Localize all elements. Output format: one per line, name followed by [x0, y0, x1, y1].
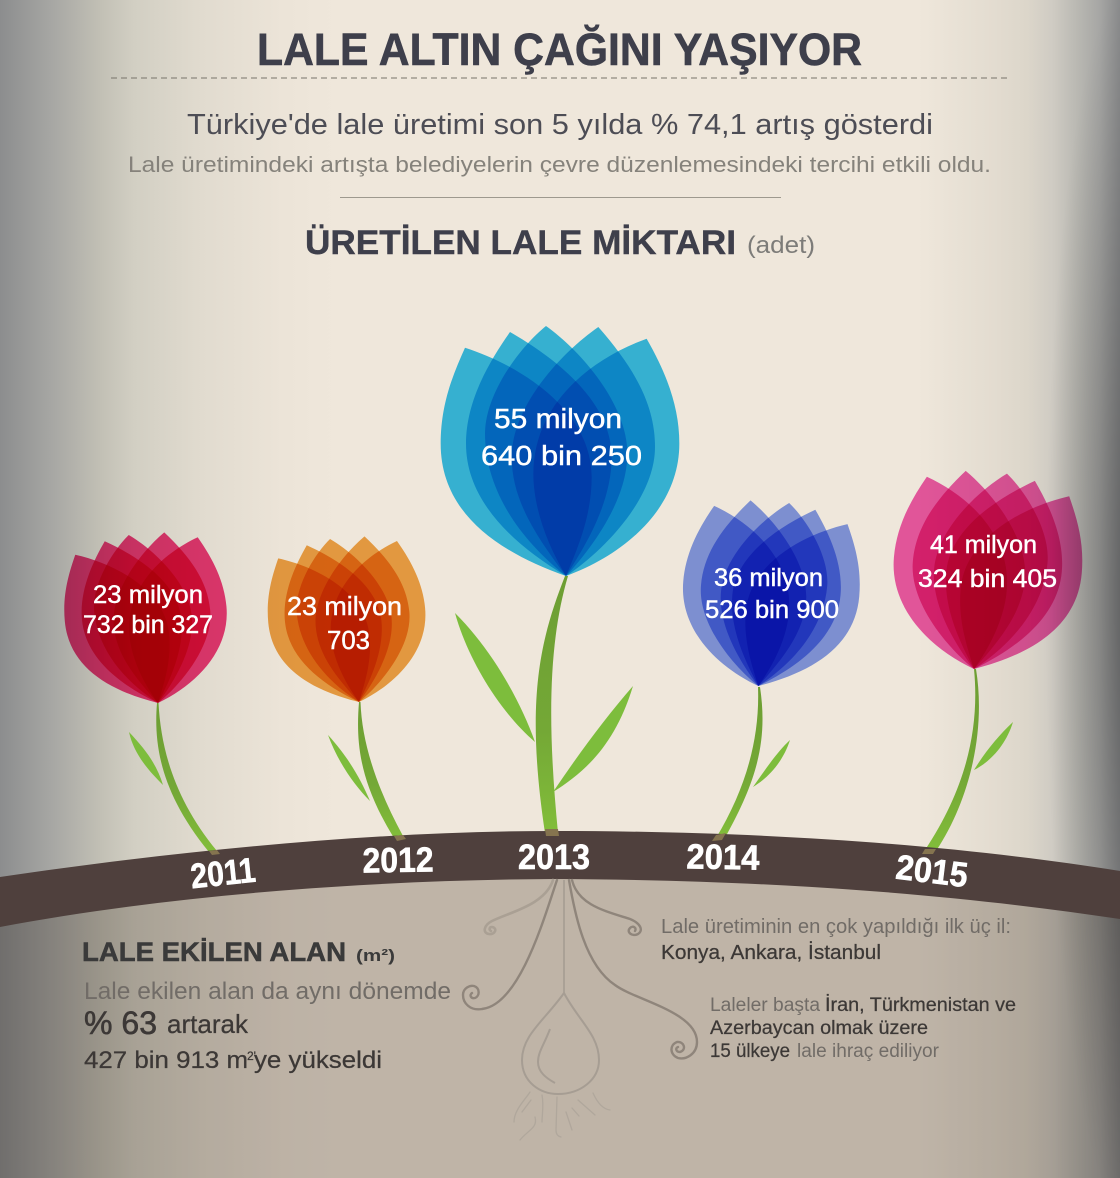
planted area value: ye yükseldi [254, 1047, 382, 1074]
stem and leaf 2011 [129, 703, 217, 852]
value 2011: 23 milyon [93, 581, 203, 609]
panel: exports [710, 995, 1016, 1062]
panel: top provinces: Lale üretiminin en çok yapıldığı ilk üç il: [661, 916, 1011, 938]
panel: top provinces: Konya, Ankara, İstanbul [661, 941, 881, 964]
value 2014: 36 milyon [714, 564, 823, 592]
panel: exports: Azerbaycan olmak üzere [710, 1018, 928, 1039]
value 2013 [481, 403, 642, 471]
value 2015: 324 bin 405 [918, 565, 1057, 593]
roots and bulb [463, 880, 697, 1140]
panel: exports: Laleler başta [710, 995, 820, 1016]
value 2012: 703 [327, 625, 370, 655]
value 2015 [918, 531, 1057, 593]
planted area heading: LALE EKİLEN ALAN [82, 937, 346, 967]
value 2013: 640 bin 250 [481, 440, 642, 471]
year 2011: 2011 [189, 851, 257, 896]
planted area value [84, 1047, 382, 1074]
value 2013: 55 milyon [494, 403, 622, 434]
year labels [189, 837, 970, 896]
value 2011 [83, 581, 213, 639]
value 2012 [287, 591, 402, 655]
faint root spiral [485, 880, 553, 934]
stem and leaf 2015 [925, 669, 1013, 851]
tulip 2015 [885, 464, 1090, 678]
chart heading: ÜRETİLEN LALE MİKTARI [305, 224, 736, 262]
stem roots in band [209, 829, 936, 855]
title: LALE ALTIN ÇAĞINI YAŞIYOR [257, 24, 862, 75]
tulip 2012 [261, 531, 433, 710]
root spiral to left text [463, 880, 557, 1009]
planted area value: 2' [247, 1049, 256, 1063]
stem and leaves 2013 [455, 576, 633, 833]
rootlets [514, 1092, 610, 1140]
soil below ground [0, 855, 1120, 1178]
panel: exports: lale ihraç ediliyor [797, 1041, 940, 1062]
value 2014: 526 bin 900 [705, 596, 839, 624]
planted area heading: (m²) [356, 946, 395, 965]
year 2012: 2012 [362, 840, 434, 881]
panel: exports: 15 ülkeye [710, 1041, 790, 1062]
planted area increase [84, 1005, 249, 1041]
description: Lale üretimindeki artışta belediyelerin çevre düzenlemesindeki tercihi etkili oldu. [128, 152, 991, 177]
year 2015: 2015 [894, 848, 970, 895]
planted area increase: artarak [167, 1009, 249, 1039]
planted area text: Lale ekilen alan da aynı dönemde [84, 978, 451, 1005]
panel: planted area [82, 937, 451, 1074]
value 2015: 41 milyon [930, 531, 1037, 559]
tulip 2013 [441, 326, 679, 576]
stem and leaf 2014 [716, 687, 790, 838]
ground band [0, 831, 1120, 927]
year 2014: 2014 [686, 837, 760, 878]
bulb [522, 993, 599, 1094]
subtitle: Türkiye'de lale üretimi son 5 yılda % 74,1 artış gösterdi [187, 109, 933, 141]
stem and leaf 2012 [328, 702, 403, 838]
value 2012: 23 milyon [287, 591, 402, 621]
value 2011: 732 bin 327 [83, 611, 213, 639]
value 2014 [705, 564, 839, 624]
panel: exports: İran, Türkmenistan ve [825, 995, 1016, 1016]
center root [563, 880, 565, 993]
bulb inner curve [538, 1029, 555, 1083]
planted area increase: % 63 [84, 1005, 157, 1041]
panel: top provinces [661, 916, 1011, 964]
root spiral to export text [569, 880, 697, 1058]
tulip 2011 [57, 527, 235, 711]
planted area value: 427 bin 913 m [84, 1047, 248, 1074]
year 2013: 2013 [518, 838, 590, 877]
chart heading: (adet) [747, 232, 815, 259]
root spiral to provinces text [572, 880, 641, 935]
tulip 2014 [675, 494, 867, 694]
